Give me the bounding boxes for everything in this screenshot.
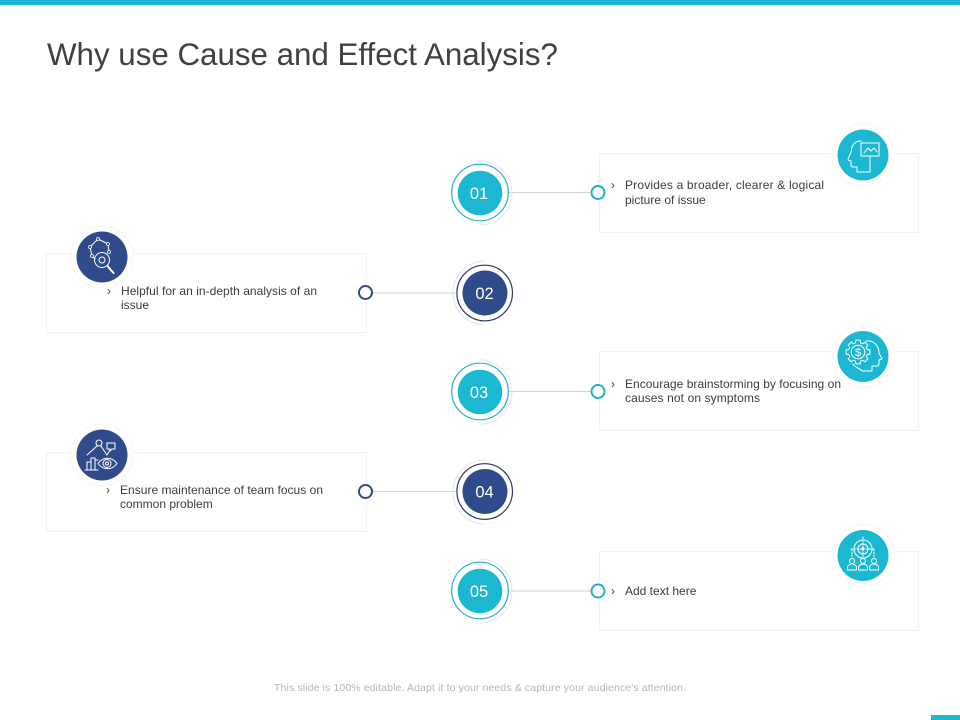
connector: 02 (359, 286, 458, 299)
number badge 01 (452, 161, 512, 225)
number badge 04: 04 (475, 484, 494, 502)
connector: 05 (505, 584, 604, 598)
item 01 text: picture of issue (625, 193, 706, 207)
icon: head with dollar gear (832, 326, 894, 388)
item 03 text: Encourage brainstorming by focusing on (625, 377, 841, 391)
item 04 text: Ensure maintenance of team focus on (120, 483, 323, 497)
number badge 02 (453, 261, 512, 325)
item 02 text: Helpful for an in-depth analysis of an (121, 284, 317, 298)
item 04 text: › (106, 483, 110, 497)
item 05 text: Add text here (625, 584, 697, 598)
connector: 04 (359, 485, 458, 498)
connector: 03 (505, 385, 604, 398)
panel: item 04 card (46, 452, 366, 532)
icon: head with dollar gear: $ (855, 347, 861, 359)
icon: magnifier on network (71, 226, 133, 288)
item 01 text: Provides a broader, clearer & logical (625, 178, 824, 192)
top accent bar (0, 0, 960, 5)
number badge 05: 05 (470, 583, 488, 601)
panel: item 03 card (600, 352, 918, 430)
number badge 04 (453, 460, 512, 524)
footer note: This slide is 100% editable. Adapt it to your needs & capture your audience's attention. (274, 682, 686, 694)
number badge 01: 01 (470, 185, 488, 203)
bottom-right accent (931, 715, 960, 720)
number badge 05 (452, 559, 512, 623)
number badge 02: 02 (475, 285, 494, 303)
icon: target with team (832, 524, 894, 586)
item 02 text: issue (121, 298, 149, 312)
item 03 text: causes not on symptoms (625, 391, 760, 405)
item 04 text: common problem (120, 497, 213, 511)
panel: item 05 card (600, 552, 918, 630)
icon: head with picture (832, 124, 894, 186)
panel: item 02 card (46, 254, 366, 332)
connector: 01 (505, 186, 604, 199)
item 05 text: › (611, 584, 615, 598)
title: Why use Cause and Effect Analysis? (47, 37, 558, 72)
item 03 text: › (611, 377, 615, 391)
item 01 text: › (611, 178, 615, 192)
icon: chart with eye (71, 424, 133, 486)
number badge 03 (452, 360, 512, 424)
number badge 03: 03 (470, 384, 488, 402)
item 02 text: › (107, 284, 111, 298)
panel: item 01 card (600, 154, 918, 232)
